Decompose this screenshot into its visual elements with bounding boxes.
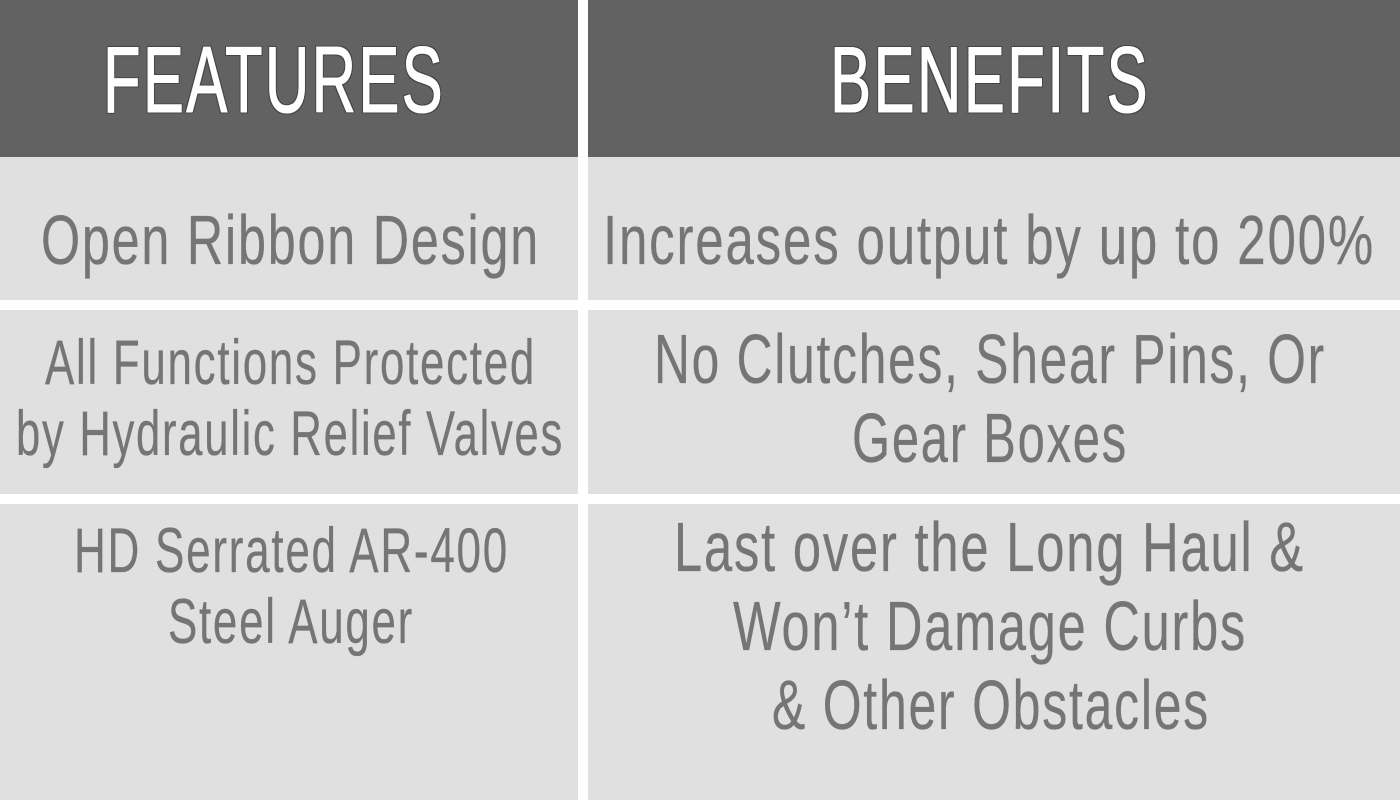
row 1 benefit: increases output bbox=[588, 157, 1400, 300]
row 3 feature: serrated auger: Steel Auger bbox=[168, 587, 414, 657]
row 2 feature: hydraulic relief valves: by Hydraulic Relief Valves bbox=[16, 399, 564, 469]
header: benefits: BENEFITS bbox=[830, 27, 1150, 132]
row 3 feature: serrated auger bbox=[0, 504, 578, 800]
header: features: FEATURES bbox=[103, 27, 445, 132]
row 3 benefit: last over the long haul: & Other Obstacles bbox=[772, 666, 1210, 744]
row 2 feature: hydraulic relief valves bbox=[0, 310, 578, 494]
header: benefits bbox=[588, 0, 1400, 157]
row 3 benefit: last over the long haul bbox=[588, 504, 1400, 800]
header: features bbox=[0, 0, 578, 157]
row 1 feature: open ribbon design: Open Ribbon Design bbox=[41, 201, 540, 279]
row 1 feature: open ribbon design bbox=[0, 157, 578, 300]
row 2 benefit: no clutches bbox=[588, 310, 1400, 494]
row 3 feature: serrated auger: HD Serrated AR-400 bbox=[74, 516, 509, 586]
row 2 benefit: no clutches: Gear Boxes bbox=[852, 399, 1128, 477]
row 2 feature: hydraulic relief valves: All Functions Protected bbox=[45, 328, 536, 398]
